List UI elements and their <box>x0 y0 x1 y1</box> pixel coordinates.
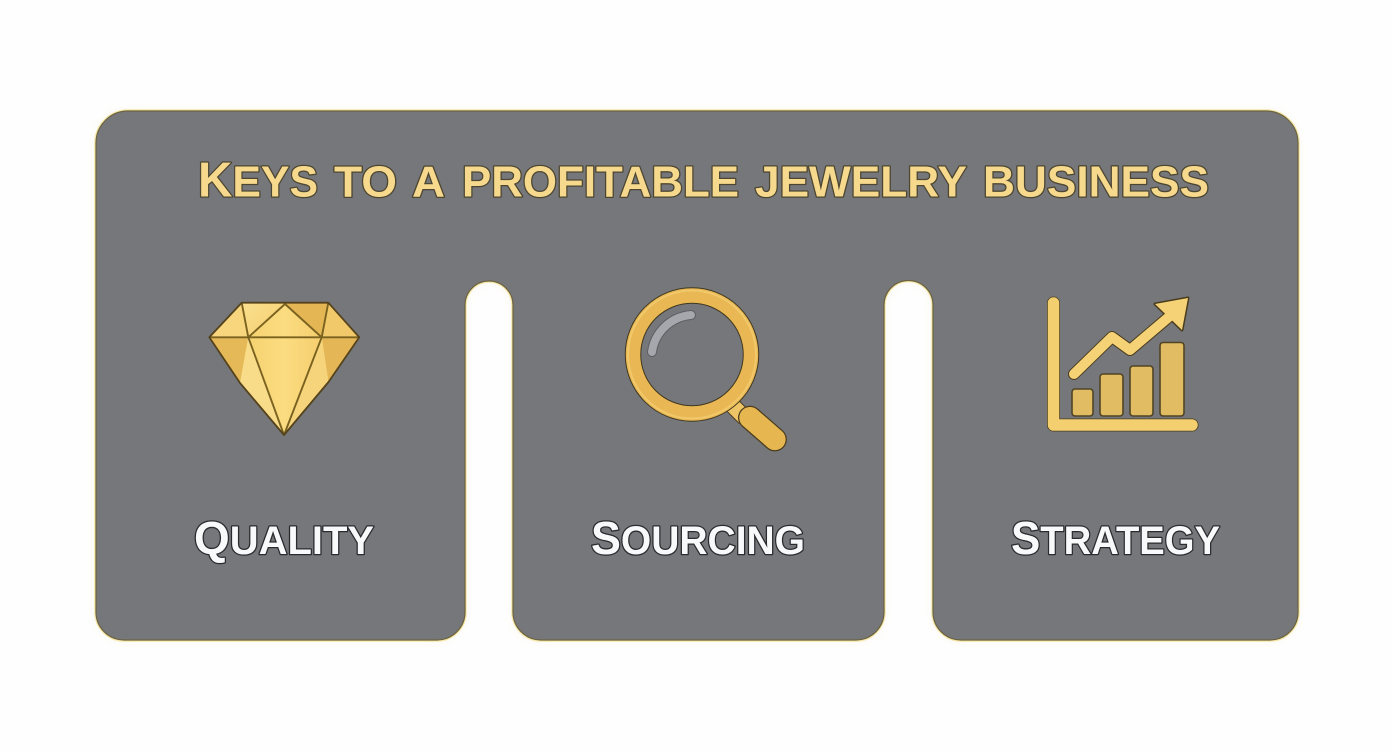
title: BUSINESS <box>983 158 1209 206</box>
chart bars <box>1072 342 1184 416</box>
title: KEYS <box>198 154 318 208</box>
label: quality: QUALITY <box>194 512 374 564</box>
icon: magnifying glass <box>628 290 777 439</box>
label: sourcing: SOURCING <box>591 512 805 564</box>
label: strategy: STRATEGY <box>1011 512 1220 564</box>
icon: growth chart <box>1054 298 1192 425</box>
panel: main background with three columns <box>96 111 1298 640</box>
icon: diamond <box>209 303 359 435</box>
title: TO <box>334 158 397 206</box>
title: PROFITABLE <box>462 158 739 206</box>
chart trend arrow <box>1074 298 1188 374</box>
title: JEWELRY <box>755 158 967 206</box>
title <box>198 154 1209 208</box>
title: A <box>412 158 445 206</box>
chart axes <box>1054 303 1192 425</box>
